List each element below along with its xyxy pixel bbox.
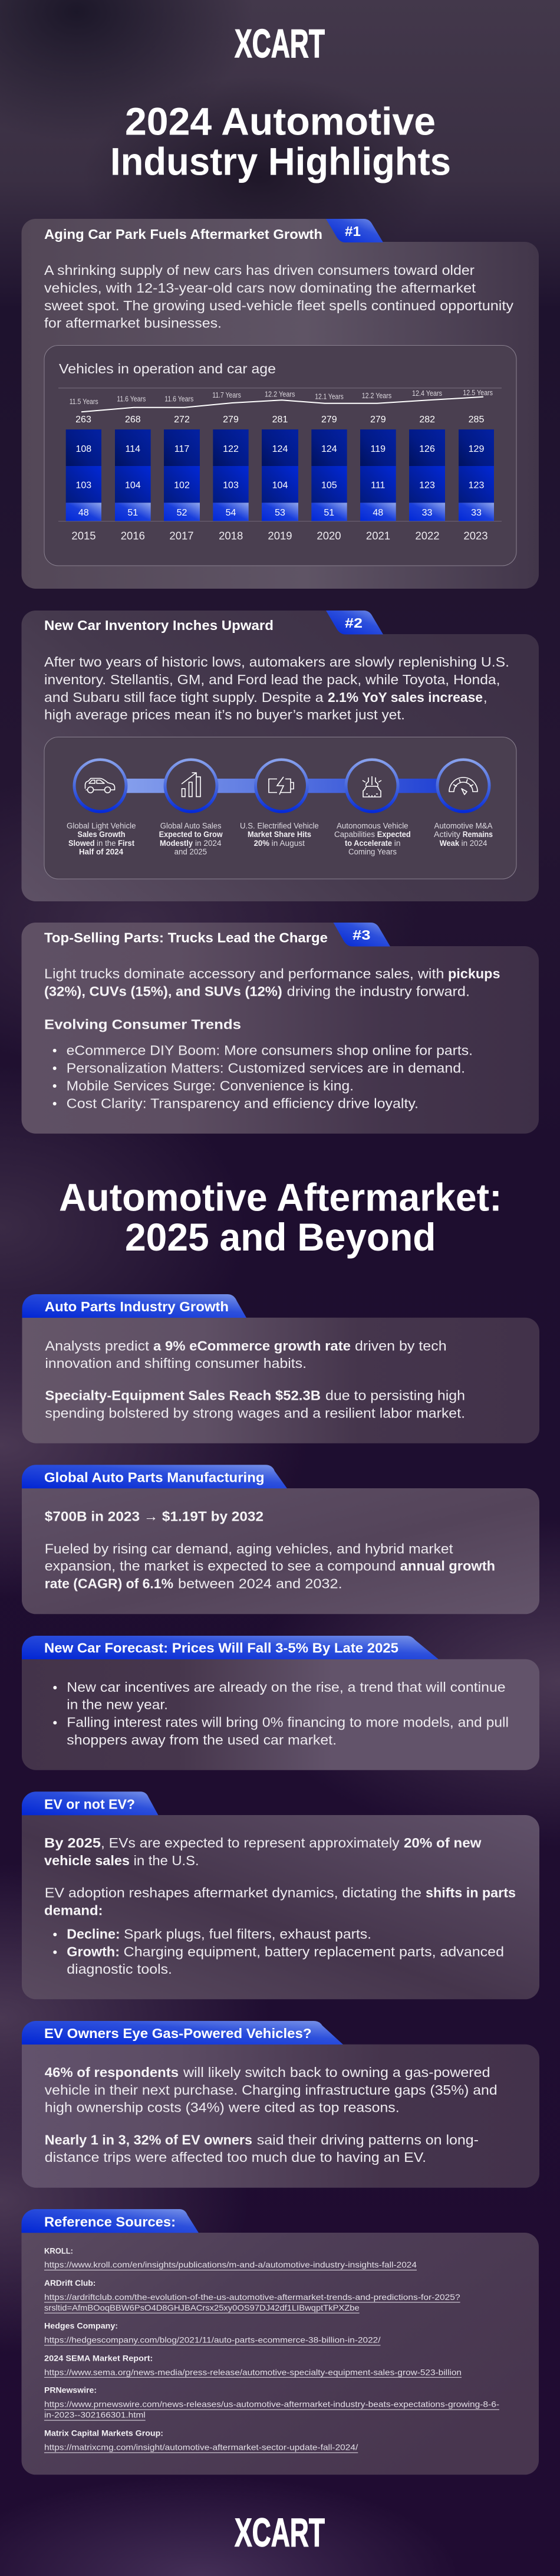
text block [44,1835,516,1918]
title: 2025 and beyond [59,1176,502,1259]
text block: distance trips were affected too much due to having an EV. [45,2150,426,2165]
text block [45,2065,498,2165]
source: KROLL: https://www.kroll.com/en/insights/publications/m-and-a/automotive-industry-insights-fall-2024 [44,2260,417,2269]
panel: EV owners eye gas-powered vehicles [22,2021,539,2188]
bullet list: trends: eCommerce DIY Boom: More consumers shop online for parts. [67,1042,473,1058]
caption 2: Expected to Grow [159,830,223,839]
tab heading: New Car Forecast: Prices Will Fall 3-5% By Late 2025 [44,1640,398,1656]
bar 2017 [164,415,200,542]
text block #2: high average prices mean it’s no buyer’s market just yet. [44,707,405,722]
bar 2021: 279 [370,415,386,425]
bar 2019 [262,415,298,542]
caption 5: Automotive M&A [434,821,493,830]
caption 2: and 2025 [174,848,207,857]
caption 4 [334,821,411,857]
bar 2017: 117 [174,444,189,454]
bar 2020: 279 [321,415,337,425]
bar 2022: 126 [419,444,435,454]
step 1 [67,759,136,857]
bar 2021: 2021 [366,529,390,542]
bullet list: Decline: [67,1927,120,1942]
text block #3: (32%), CUVs (15%), and SUVs (12%) [44,983,282,999]
bar 2023: 123 [469,480,484,490]
text block: rate (CAGR) of 6.1% [45,1576,173,1591]
bar 2022: 282 [419,415,435,425]
heading #3: Top-Selling Parts: Trucks Lead the Charge [44,930,328,945]
text block: vehicle in their next purchase. Charging infrastructure gaps (35%) and [45,2082,498,2098]
line: car age: 12.2 Years [265,390,295,399]
bar 2018: 2018 [219,529,243,542]
text block #1: for aftermarket businesses. [44,315,222,330]
bullet list: Charging equipment, battery replacement parts, advanced [124,1944,504,1960]
connector bar [100,779,463,793]
logo: XCART bottom: XCART [235,2511,325,2555]
text block #3: driving the industry forward. [287,983,470,999]
panel: global auto parts manufacturing [22,1465,539,1614]
text block #3: pickups [448,966,500,981]
bullet list: diagnostic tools. [67,1961,172,1977]
bar 2023: 285 [469,415,484,425]
text block: in the U.S. [134,1853,199,1868]
badge #3: #3 [353,927,370,943]
bar 2017: 102 [174,480,190,490]
text block: will likely switch back to owning a gas-powered [183,2065,490,2080]
caption 5: in 2024 [462,839,487,848]
line: car age: 12.2 Years [362,392,391,400]
caption 4: Autonomous Vehicle [337,821,409,830]
timeline panel [44,737,516,879]
tab heading: Global Auto Parts Manufacturing [44,1469,264,1485]
text block #2: 2.1% YoY sales increase [328,690,483,705]
text block: Analysts predict [45,1338,149,1353]
tab heading [22,1294,246,1318]
line: car age [70,389,493,412]
stacked bars [66,415,494,542]
panel: auto parts industry growth [22,1294,539,1443]
bullet list [53,1679,509,1748]
tab heading: Reference Sources: [44,2214,176,2229]
bar 2015: 48 [78,508,89,518]
tab heading: EV Owners Eye Gas-Powered Vehicles? [44,2026,311,2041]
text block #2: inventory. Stellantis, GM, and Ford lead the pack, while Toyota, Honda, [44,672,500,687]
tab heading [21,2209,199,2233]
caption 5: Remains [463,830,493,839]
caption 2 [159,821,223,857]
caption 1: Global Light Vehicle [67,821,136,830]
caption 5: Activity [434,830,460,839]
text block: EV adoption reshapes aftermarket dynamics, dictating the [45,1885,421,1901]
line: car age: 12.5 Years [463,389,493,397]
source: Matrix Capital: Matrix Capital Markets Group: [44,2428,163,2437]
source: PRNewswire: in-2023--302166301.html [44,2410,146,2420]
caption 3 [240,821,319,848]
text block: due to persisting high [325,1388,465,1403]
panel: reference sources [21,2209,539,2475]
bar 2016: 51 [127,508,138,518]
bar 2020: 124 [321,444,337,454]
bar 2022: 2022 [415,529,440,542]
source: Matrix Capital: https://matrixcmg.com/insight/automotive-aftermarket-sector-update-fall-2024/ [44,2443,358,2452]
bar 2018: 103 [223,480,239,490]
source: KROLL [44,2246,417,2270]
text block: driven by tech [355,1338,447,1353]
caption 1: in the [97,839,116,848]
icon: gauge [449,777,477,795]
panel: EV or not EV [22,1791,539,1999]
text block: a 9% eCommerce growth rate [153,1338,351,1353]
bullet list [53,1927,504,1977]
text block #2: and Subaru still face tight supply. Despite a [44,690,324,705]
stat line: $700B in 2023 → $1.19T by 2032 [45,1508,263,1524]
text block: vehicle sales [44,1853,130,1868]
badge #2 [326,611,383,635]
caption 4: Coming Years [348,848,397,857]
bar 2016: 104 [125,480,141,490]
line: car age: 11.6 Years [117,395,146,403]
step 2 [159,759,223,857]
icon: autonomous car [363,776,381,797]
badge #1 [326,219,383,242]
text block: between 2024 and 2032. [178,1576,342,1591]
panel: #3 top-selling parts [21,923,539,1134]
source: SEMA: 2024 SEMA Market Report: [44,2353,153,2362]
bullet list: trends: Personalization Matters: Customized services are in demand. [67,1060,465,1075]
bar 2018: 279 [223,415,239,425]
text block #2: After two years of historic lows, automakers are slowly replenishing U.S. [44,654,509,670]
bar 2018 [213,415,249,542]
caption 5: Weak [440,839,459,848]
tab heading [22,2021,343,2045]
source: ARDrift Club: ARDrift Club: [44,2278,95,2288]
text block #1: A shrinking supply of new cars has driven consumers toward older [44,262,475,278]
step 3 [240,759,319,848]
text block: annual growth [400,1558,495,1574]
text block: , EVs are expected to represent approximately [101,1835,400,1850]
bar 2017: 52 [177,508,187,518]
text block #1: vehicles, with 12-13-year-old cars now dominating the aftermarket [44,280,476,296]
caption 2: in 2024 [195,839,222,848]
bar 2019: 53 [275,508,285,518]
source: PRNewswire: https://www.prnewswire.com/news-releases/us-automotive-aftermarket-industry-beats-expectations-growing-8-6- [44,2400,499,2409]
line: car age: 12.4 Years [412,389,442,398]
tab heading: Auto Parts Industry Growth [45,1299,229,1314]
source: Hedges Company [44,2321,381,2345]
bar 2018: 122 [223,444,239,454]
tab heading: EV or not EV? [44,1797,135,1812]
line: car age: 11.7 Years [212,391,241,399]
bar 2017: 272 [174,415,190,425]
panel: new car forecast [22,1636,539,1770]
bar 2019: 124 [272,444,288,454]
text block: By 2025 [44,1835,101,1850]
bar 2019: 104 [272,480,288,490]
bar 2019: 2019 [268,529,292,542]
bullet list: trends: Mobile Services Surge: Convenience is king. [67,1078,354,1093]
bullet list: Growth: [67,1944,120,1960]
source: SEMA [44,2353,462,2378]
caption 4: in [394,839,400,848]
bar 2021: 48 [373,508,383,518]
badge #2: #2 [345,615,363,631]
source: PRNewswire: PRNewswire: [44,2385,97,2395]
bullet list: Spark plugs, fuel filters, exhaust parts. [124,1927,371,1942]
tab heading [22,1465,287,1488]
bar 2020 [311,415,347,542]
text block: innovation and shifting consumer habits. [45,1356,307,1371]
title [110,99,451,183]
bullet list: trends: Cost Clarity: Transparency and efficiency drive loyalty. [67,1095,419,1111]
text block: shifts in parts [426,1885,516,1901]
bar 2021 [360,415,396,542]
caption 1: Half of 2024 [79,848,123,857]
source: ARDrift Club: https://ardriftclub.com/the-evolution-of-the-us-automotive-aftermarket-trends-and-predictions-for-2025? [44,2292,460,2302]
line: car age: 12.1 Years [315,393,344,401]
caption 4: Capabilities [334,830,375,839]
bar 2020: 2020 [317,529,341,542]
bar 2023: 33 [471,508,482,518]
bar 2015: 2015 [71,529,96,542]
badge #1: #1 [345,224,361,239]
bar 2020: 51 [324,508,334,518]
text block [45,1338,465,1421]
text block #2 [44,654,509,722]
line: car age: 11.5 Years [70,398,98,406]
caption 2: Global Auto Sales [160,821,222,830]
text block: Fueled by rising car demand, aging vehicles, and hybrid market [45,1541,453,1556]
icon: rising chart [182,773,200,796]
chart title: Vehicles in operation and car age [59,361,276,376]
text block #3: Light trucks dominate accessory and performance sales, with [44,966,444,981]
bar 2016: 2016 [121,529,145,542]
bar 2022 [409,415,445,542]
text block [45,1541,495,1591]
bar 2021: 111 [371,480,386,490]
logo: XCART top: XCART [235,21,325,66]
caption 3: Market Share Hits [248,830,311,839]
title: Industry Highlights [110,139,451,183]
bar 2016 [115,415,151,542]
badge #3 [334,923,390,946]
caption 4: to Accelerate [345,839,392,848]
source: Hedges Company: Hedges Company: [44,2321,118,2331]
step 4 [334,759,411,857]
caption 1: Sales Growth [78,830,125,839]
caption 1 [67,821,136,857]
caption 1: First [118,839,134,848]
source: ARDrift Club [44,2278,460,2314]
chart: vehicles in operation and car age [44,346,516,566]
text block: Specialty-Equipment Sales Reach $52.3B [45,1388,321,1403]
tab heading [22,1791,158,1815]
tab heading [22,1636,439,1659]
text block: Nearly 1 in 3, 32% of EV owners [45,2132,252,2147]
bullet list: New car incentives are already on the rise, a trend that will continue [67,1679,506,1695]
text block: spending bolstered by strong wages and a resilient labor market. [45,1406,465,1421]
step 5 [434,759,493,848]
bar 2016: 268 [125,415,141,425]
subheading: evolving consumer trends: Evolving Consumer Trends [44,1016,241,1032]
caption 3: 20% [254,839,269,848]
bar 2015: 108 [75,444,91,454]
heading #1: Aging Car Park Fuels Aftermarket Growth [44,227,322,242]
title: 2024 Automotive [125,99,436,143]
text block: 46% of respondents [45,2065,179,2080]
bar 2023: 129 [469,444,484,454]
icon: car [85,779,114,793]
text block #3 [44,966,500,999]
caption 3: in August [272,839,305,848]
bar 2015: 103 [75,480,91,490]
bar 2023 [459,415,494,542]
source: KROLL: KROLL: [44,2246,73,2255]
bar 2015 [66,415,101,542]
bullet list: shoppers away from the used car market. [67,1732,337,1748]
text block: expansion, the market is expected to see a compound [45,1558,396,1574]
source: ARDrift Club: srsltid=AfmBOoqBBW6PsO4D8GHJBACrsx25xy0OS97DJ42df1LIBwqptTkPXZbe [44,2303,360,2312]
caption 2: Modestly [160,839,193,848]
bar 2015: 263 [75,415,91,425]
panel: #1 aging car park [21,219,539,589]
bullet list: Falling interest rates will bring 0% financing to more models, and pull [67,1715,509,1730]
bar 2020: 105 [321,480,337,490]
text block: said their driving patterns on long- [257,2132,479,2147]
heading #2: New Car Inventory Inches Upward [44,618,274,633]
title: 2025 and beyond: Automotive Aftermarket: [59,1176,502,1219]
text block: 20% of new [404,1835,482,1850]
caption 4: Expected [377,830,411,839]
bar 2022: 123 [419,480,435,490]
text block: high ownership costs (34%) were cited as top reasons. [45,2100,400,2115]
bar 2017: 2017 [169,529,194,542]
bar 2016: 114 [126,444,140,454]
bullet list: trends [53,1042,473,1111]
bar 2022: 33 [422,508,433,518]
text block #2: , [483,690,487,705]
text block: demand: [44,1903,103,1918]
source: Matrix Capital [44,2428,358,2453]
text block #1 [44,262,513,330]
bar 2019: 281 [272,415,288,425]
source: Hedges Company: https://hedgescompany.com/blog/2021/11/auto-parts-ecommerce-38-billion-in-2022/ [44,2335,381,2345]
title: 2025 and beyond: 2025 and Beyond [125,1215,436,1259]
icon: battery bolt [269,777,294,795]
bar 2021: 119 [371,444,386,454]
source: SEMA: https://www.sema.org/news-media/press-release/automotive-specialty-equipment-sales-grow-523-billion [44,2367,462,2377]
line: car age: 11.6 Years [164,395,193,403]
text block #1: sweet spot. The growing used-vehicle fleet spells continued opportunity [44,298,513,313]
bar 2023: 2023 [463,529,488,542]
caption 5 [434,821,493,848]
bar 2018: 54 [226,508,236,518]
source: PRNewswire [44,2385,499,2421]
caption 1: Slowed [68,839,95,848]
caption 3: U.S. Electrified Vehicle [240,821,319,830]
bullet list: in the new year. [67,1697,168,1712]
panel: #2 new car inventory [21,611,539,901]
